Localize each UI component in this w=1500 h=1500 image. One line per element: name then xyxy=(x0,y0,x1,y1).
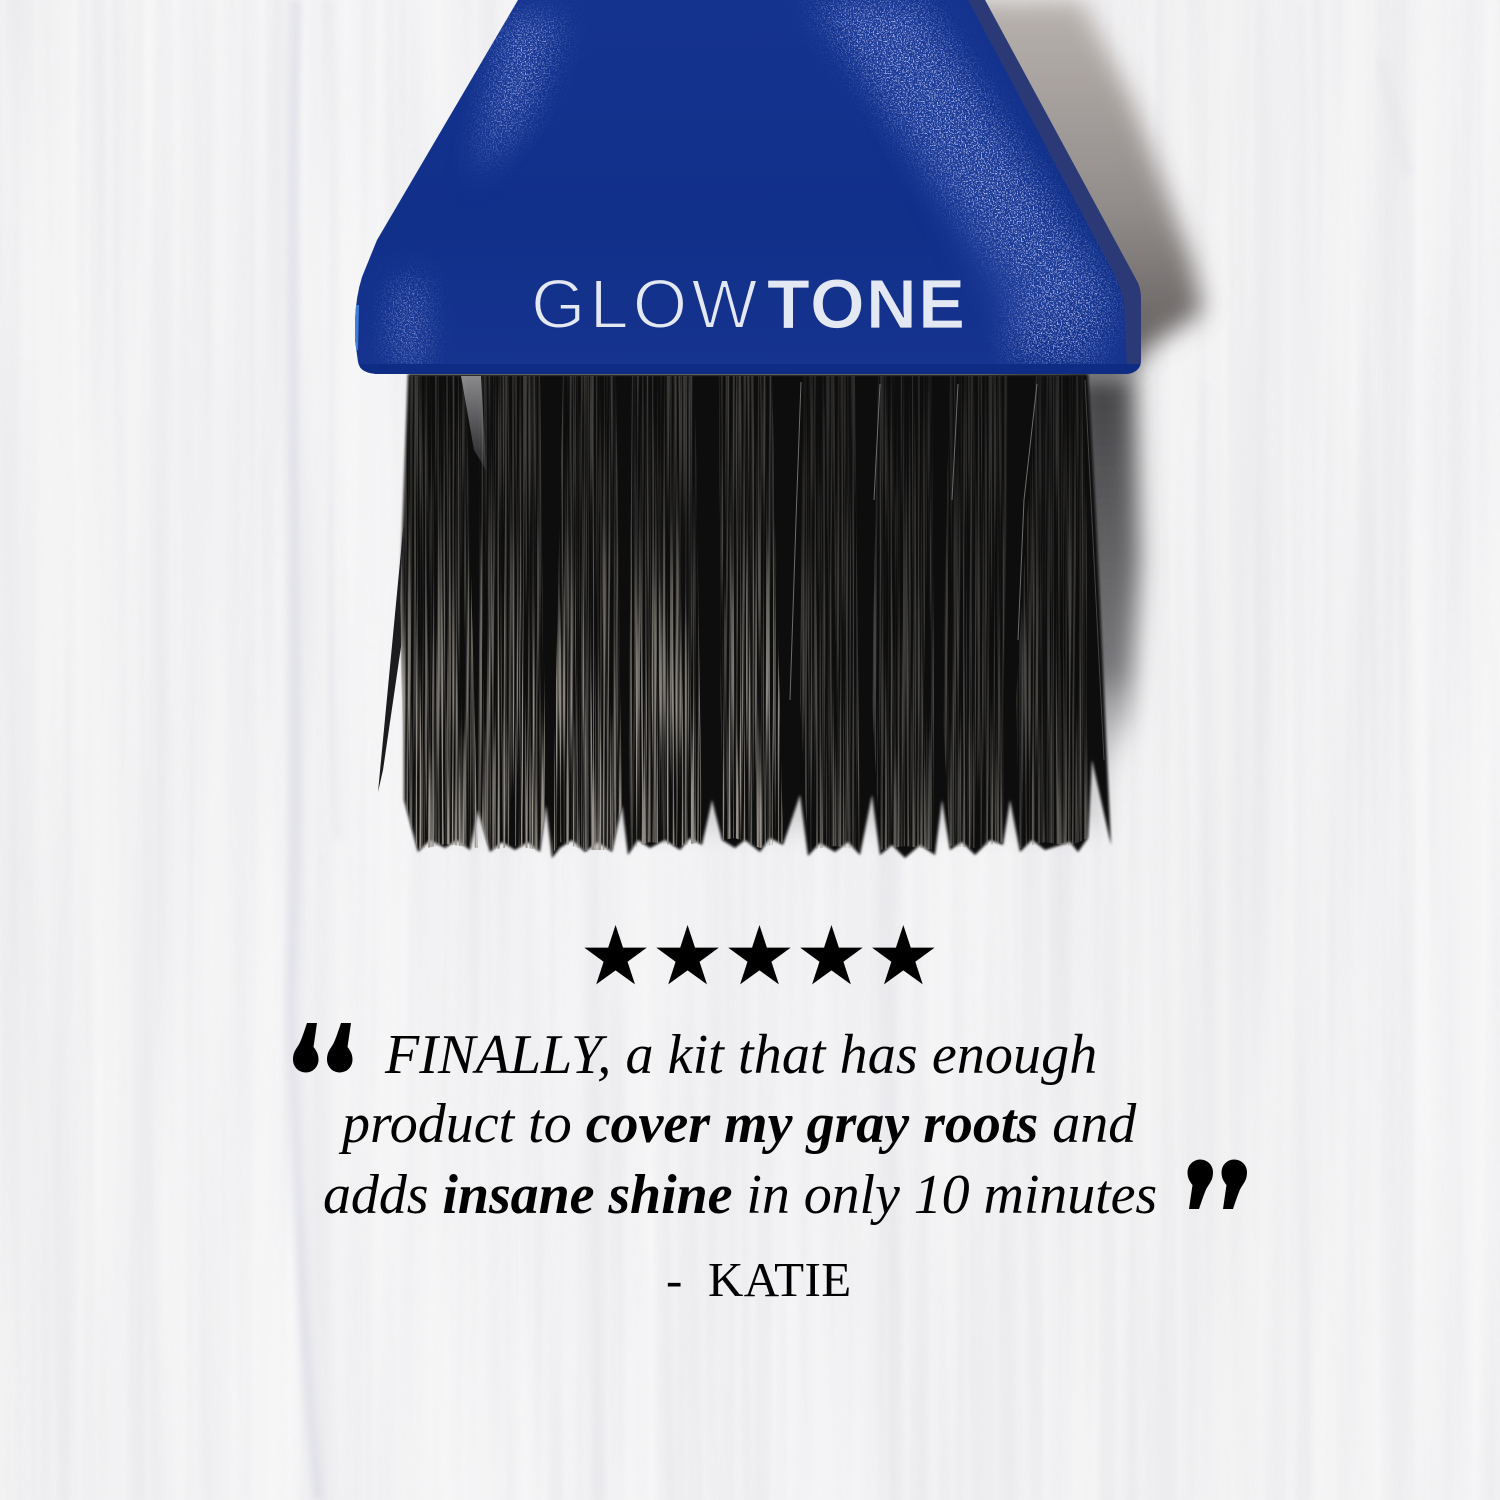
head body xyxy=(340,0,1160,380)
testimonial quote: FINALLY, a kit that has enough xyxy=(385,1024,1097,1086)
highlighted tufts left xyxy=(400,376,783,855)
stray left hair xyxy=(378,520,404,792)
lit gap between first tufts xyxy=(461,376,486,470)
highlighted tufts right xyxy=(800,376,1088,850)
reviewer name: - KATIE xyxy=(666,1252,852,1307)
brush logo xyxy=(531,265,967,343)
bright single hairs xyxy=(790,380,1104,760)
soft sheen xyxy=(499,12,1078,318)
testimonial quote xyxy=(323,1024,1157,1226)
brush photo illustration xyxy=(355,0,1218,860)
bristle silhouette xyxy=(400,374,1111,858)
brush head xyxy=(340,0,1160,380)
bristles xyxy=(378,374,1111,858)
five star rating: ★★★★★ xyxy=(579,909,939,1004)
bottom lip xyxy=(360,364,1141,375)
left edge blue chip xyxy=(355,305,359,350)
brush shadow xyxy=(440,0,1203,825)
testimonial quote: adds insane shine in only 10 minutes xyxy=(323,1164,1157,1226)
icon: opening quotation mark xyxy=(293,1023,352,1072)
testimonial quote: product to cover my gray roots and xyxy=(342,1093,1136,1155)
logo bold word: TONE xyxy=(767,265,967,343)
speckled highlights xyxy=(395,0,1115,368)
logo light word: GLOW xyxy=(531,265,762,343)
side bevel xyxy=(968,0,1141,368)
icon: closing quotation mark xyxy=(1188,1160,1247,1209)
